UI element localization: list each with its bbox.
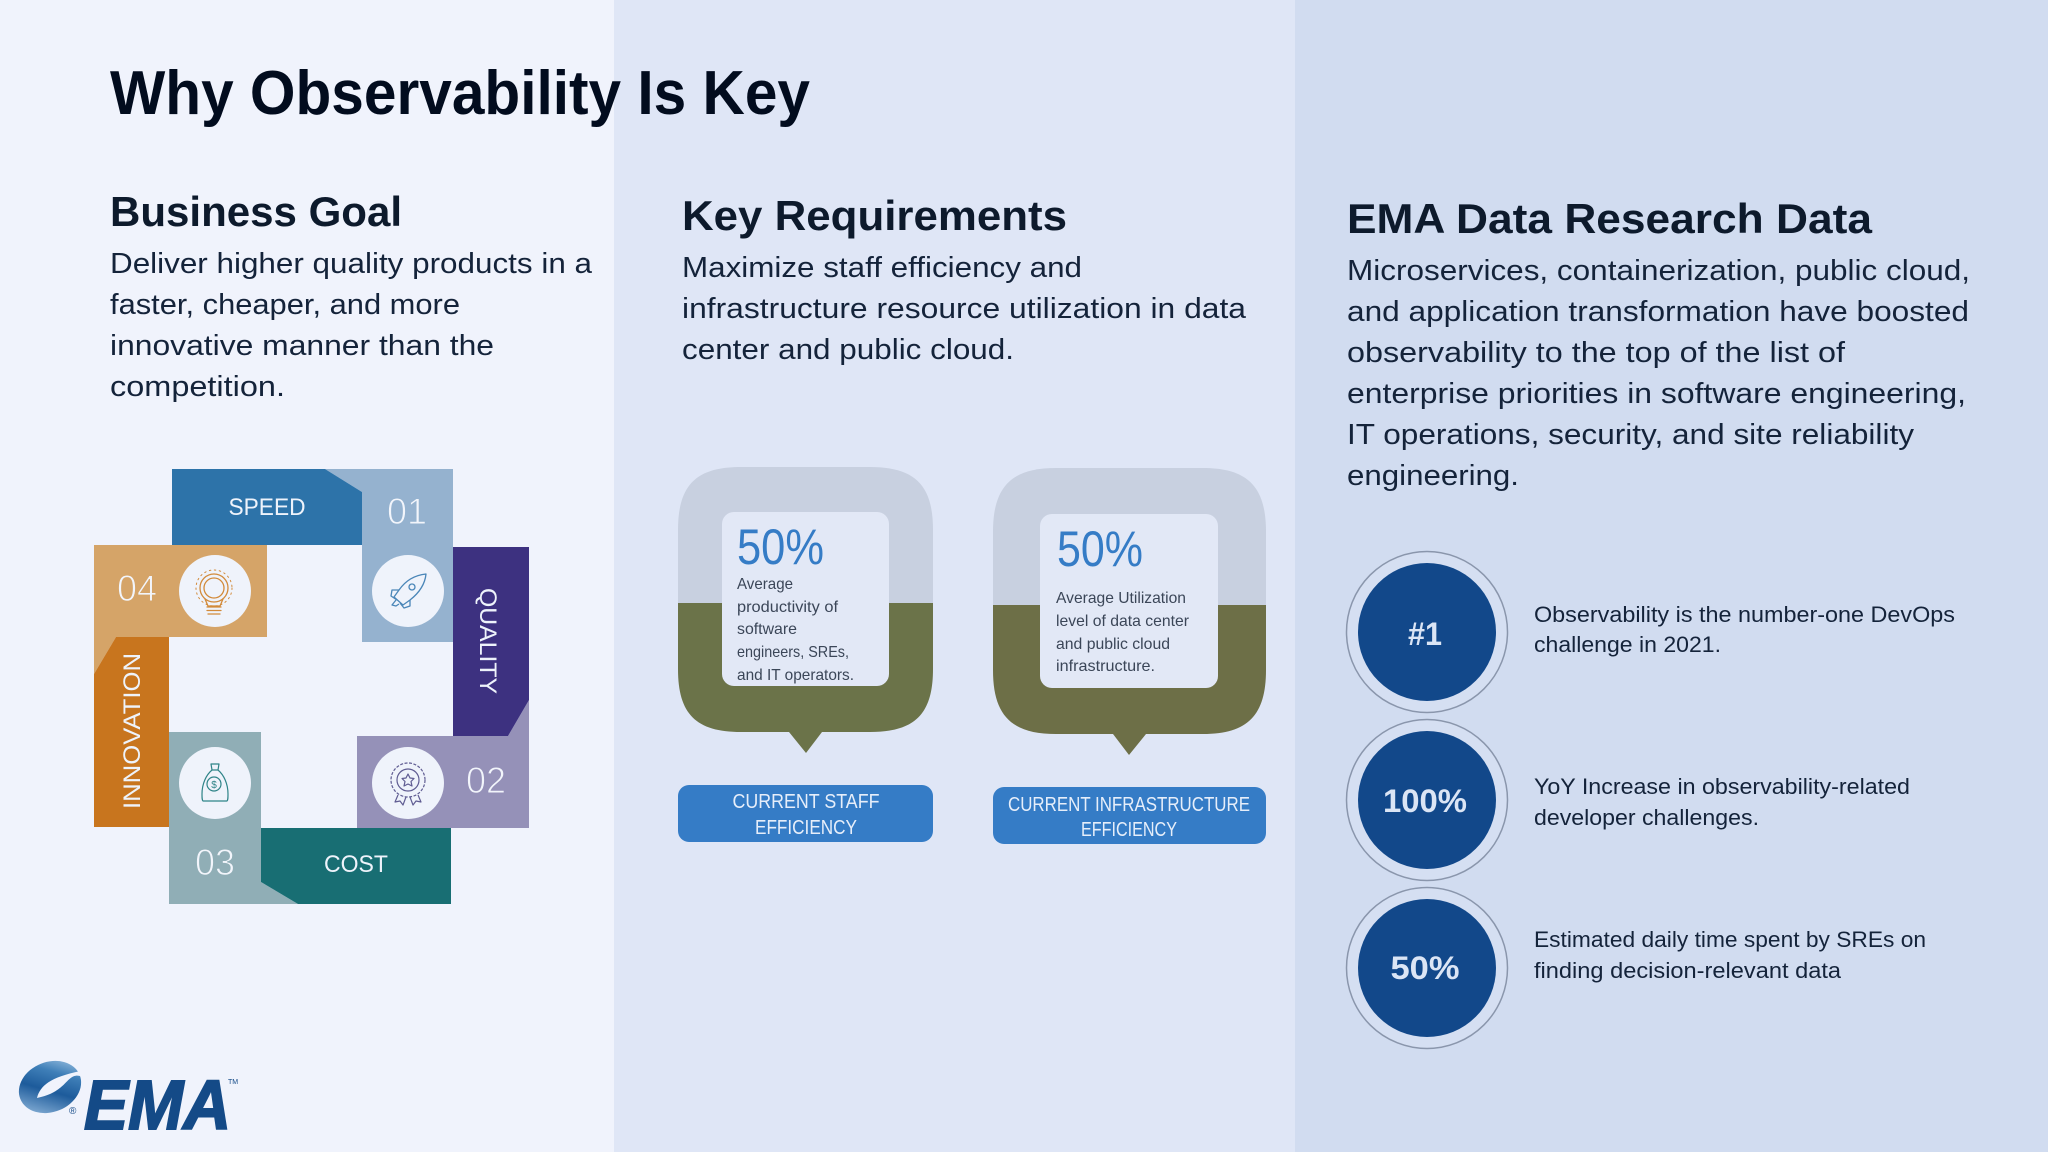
stat text: 100%: YoY Increase in observability-related bbox=[1534, 774, 1910, 799]
stat badge: 50% bbox=[1346, 888, 1508, 1048]
stat badge: 50%: 50% bbox=[1390, 950, 1460, 986]
panel: business goal bbox=[94, 188, 593, 904]
label: current staff efficiency: CURRENT STAFF bbox=[732, 791, 880, 813]
stat text: 100% bbox=[1534, 774, 1910, 830]
stat text: 50% bbox=[1534, 927, 1926, 983]
callout: infrastructure efficiency 50%: Average Utilization bbox=[1056, 590, 1186, 607]
label: current infrastructure efficiency: EFFICIENCY bbox=[1081, 819, 1177, 841]
text block: research data description: Microservices, containerization, public cloud, bbox=[1347, 255, 1970, 287]
callout: staff efficiency 50%: productivity of bbox=[737, 599, 839, 616]
segment 04: innovation bbox=[94, 545, 267, 827]
text block: business goal description: innovative manner than the bbox=[110, 330, 494, 362]
segment 02: quality: 02 bbox=[466, 760, 506, 801]
text block: research data description: and application transformation have boosted bbox=[1347, 296, 1969, 328]
panel background: research data column bbox=[1295, 0, 2048, 1152]
text block: research data description bbox=[1347, 255, 1970, 492]
callout: staff efficiency 50% bbox=[678, 467, 933, 753]
text block: key requirements description: infrastructure resource utilization in data bbox=[682, 293, 1247, 325]
title: Why Observability Is Key bbox=[110, 59, 810, 128]
stat badge: #1 bbox=[1346, 552, 1508, 712]
text block: research data description: observability to the top of the list of bbox=[1347, 337, 1846, 369]
callout: staff efficiency 50%: and IT operators. bbox=[737, 667, 854, 684]
text block: business goal description: competition. bbox=[110, 371, 285, 403]
callout: infrastructure efficiency 50%: infrastructure. bbox=[1056, 658, 1155, 675]
panel: research data bbox=[1346, 195, 1970, 1048]
icon: light bulb bbox=[179, 555, 251, 627]
stat text: #1: challenge in 2021. bbox=[1534, 632, 1721, 657]
callout: infrastructure efficiency 50%: level of data center bbox=[1056, 613, 1190, 630]
stat badge: #1: #1 bbox=[1408, 616, 1442, 652]
stat text: 50%: Estimated daily time spent by SREs on bbox=[1534, 927, 1926, 952]
text block: key requirements description: center and public cloud. bbox=[682, 334, 1014, 366]
stat badge: 100% bbox=[1346, 720, 1508, 880]
stat text: 50%: finding decision-relevant data bbox=[1534, 958, 1842, 983]
callout: staff efficiency 50%: Average bbox=[737, 576, 793, 593]
panel background: business goal column bbox=[0, 0, 614, 1152]
segment 02: quality: QUALITY bbox=[474, 588, 501, 694]
logo: EMA: ® bbox=[69, 1106, 77, 1117]
label: current staff efficiency bbox=[678, 785, 933, 842]
callout: infrastructure efficiency 50%: and public cloud bbox=[1056, 636, 1170, 653]
label: current staff efficiency: EFFICIENCY bbox=[755, 817, 857, 839]
callout: infrastructure efficiency 50%: 50% bbox=[1057, 521, 1143, 577]
segment 03: cost: 03 bbox=[195, 842, 235, 883]
segment 04: innovation: 04 bbox=[117, 568, 157, 609]
heading: research data: EMA Data Research Data bbox=[1347, 195, 1873, 242]
callout: infrastructure efficiency 50% bbox=[993, 468, 1266, 755]
text block: business goal description: Deliver higher quality products in a bbox=[110, 248, 593, 280]
logo: EMA bbox=[11, 1052, 238, 1144]
text block: key requirements description: Maximize staff efficiency and bbox=[682, 252, 1082, 284]
callout: staff efficiency 50%: 50% bbox=[737, 519, 824, 575]
segment 01: speed bbox=[172, 469, 453, 642]
segment 01: speed: SPEED bbox=[228, 494, 306, 521]
label: current infrastructure efficiency bbox=[993, 787, 1266, 844]
text block: research data description: engineering. bbox=[1347, 460, 1519, 492]
panel: key requirements bbox=[678, 192, 1266, 844]
icon: money bag bbox=[179, 747, 251, 819]
text block: research data description: IT operations, security, and site reliability bbox=[1347, 419, 1915, 451]
stat text: #1 bbox=[1534, 602, 1955, 657]
label: current infrastructure efficiency: CURRENT INFRASTRUCTURE bbox=[1008, 794, 1250, 816]
icon: rocket bbox=[372, 555, 444, 627]
cycle diagram: speed, quality, cost, innovation bbox=[94, 469, 529, 904]
stat text: 100%: developer challenges. bbox=[1534, 805, 1759, 830]
segment 03: cost bbox=[169, 732, 451, 904]
callout: staff efficiency 50%: engineers, SREs, bbox=[737, 644, 849, 661]
panel background: key requirements column bbox=[614, 0, 1295, 1152]
heading: key requirements: Key Requirements bbox=[682, 192, 1067, 239]
logo: EMA: EMA bbox=[84, 1066, 231, 1144]
segment 01: speed: 01 bbox=[387, 491, 427, 532]
callout: staff efficiency 50%: software bbox=[737, 621, 797, 638]
heading: business goal: Business Goal bbox=[110, 188, 402, 235]
stat text: #1: Observability is the number-one DevOps bbox=[1534, 602, 1955, 627]
text block: key requirements description bbox=[682, 252, 1247, 366]
segment 02: quality bbox=[357, 547, 529, 828]
text block: research data description: enterprise priorities in software engineering, bbox=[1347, 378, 1966, 410]
icon: money bag: $ bbox=[211, 780, 217, 791]
text block: business goal description bbox=[110, 248, 593, 403]
segment 03: cost: COST bbox=[324, 851, 388, 878]
stat badge: 100%: 100% bbox=[1383, 783, 1467, 819]
icon: award rosette bbox=[372, 747, 444, 819]
segment 04: innovation: INNOVATION bbox=[119, 653, 146, 809]
logo: EMA: TM bbox=[228, 1079, 238, 1086]
text block: business goal description: faster, cheaper, and more bbox=[110, 289, 460, 321]
